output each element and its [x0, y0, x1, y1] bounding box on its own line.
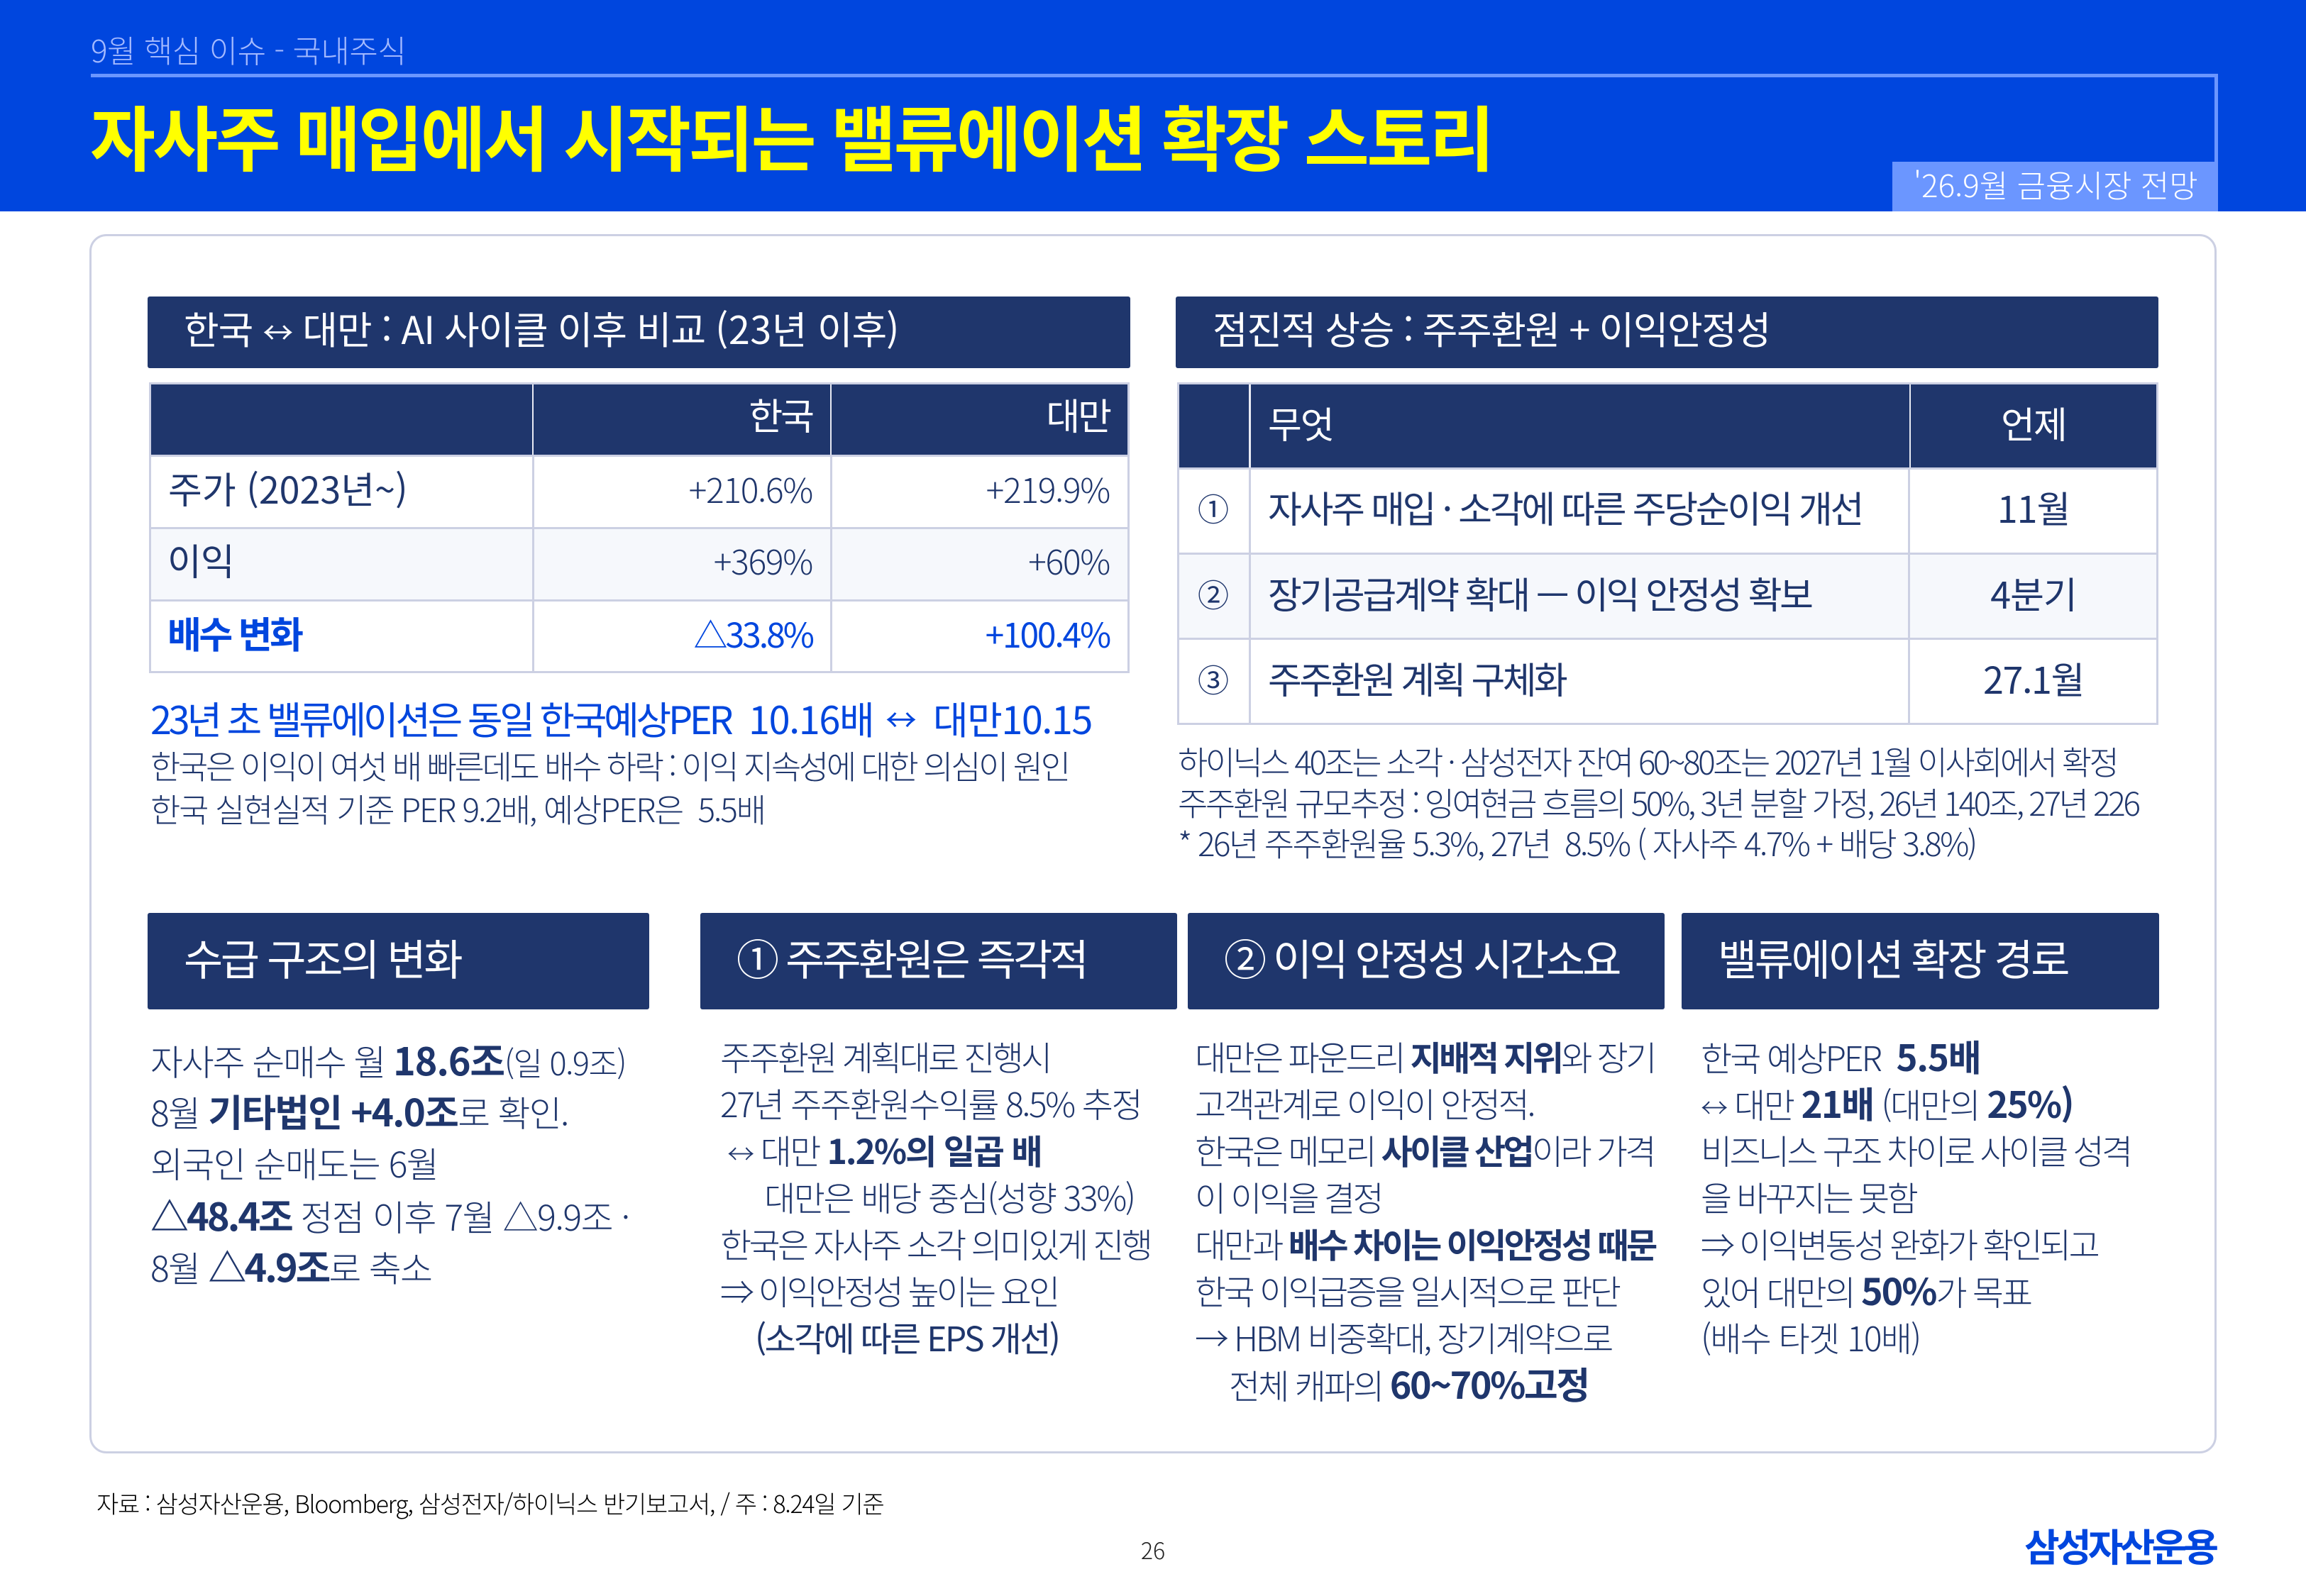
row when: 11월 — [1997, 480, 2070, 533]
note line: 한국 실현실적 기준 PER 9.2배, 예상PER은 5.5배 — [150, 785, 765, 832]
source note: 자료 : 삼성자산운용, Bloomberg, 삼성전자/하이닉스 반기보고서, / 주 : 8.24일 기준 — [96, 1485, 883, 1520]
badge — [1892, 162, 2218, 211]
panel: main card — [89, 234, 2217, 1453]
note line: * 26년 주주환원율 5.3%, 27년 8.5% ( 자사주 4.7% + 배당 3.8%) — [1178, 819, 1976, 866]
text block: valuation path: 한국 예상PER 5.5배 — [1701, 1029, 1980, 1082]
text block: valuation path: ↔ 대만 21배 (대만의 25%) — [1701, 1076, 2073, 1129]
badge text: '26.9월 금융시장 전망 — [1914, 161, 2198, 206]
text block: supply and demand: 8월 기타법인 +4.0조로 확인. — [150, 1084, 568, 1138]
text block: shareholder return: 한국은 자사주 소각 의미있게 진행 — [720, 1218, 1150, 1268]
heading text: 점진적 상승 : 주주환원 + 이익안정성 — [1213, 299, 1770, 355]
circled 1: ① — [1198, 484, 1229, 530]
text block: shareholder return: ⇒ 이익안정성 높이는 요인 — [720, 1265, 1057, 1314]
circled 3: ③ — [1198, 655, 1229, 701]
text block: earnings stability: → HBM 비중확대, 장기계약으로 — [1195, 1312, 1611, 1361]
value: +210.6% — [689, 463, 812, 513]
table header: 대만: 대만 — [1046, 387, 1110, 440]
text block: valuation path — [1701, 1029, 2130, 1361]
text block: supply and demand: 자사주 순매수 월 18.6조(일 0.9조) — [150, 1031, 626, 1087]
text block: earnings stability: 이 이익을 결정 — [1195, 1171, 1381, 1221]
heading text: ② 이익 안정성 시간소요 — [1224, 926, 1619, 988]
text block: shareholder return — [720, 1031, 1150, 1361]
heading text: 한국 ↔ 대만 : AI 사이클 이후 비교 (23년 이후) — [184, 299, 898, 355]
row 3 cells — [1179, 640, 1249, 723]
row when: 27.1월 — [1983, 651, 2084, 704]
row label: 주가: 주가 (2023년~) — [168, 461, 408, 514]
header row — [1179, 384, 2156, 467]
text block: earnings stability — [1195, 1031, 1656, 1409]
blue takeaway — [150, 689, 1092, 746]
text block: supply and demand: △48.4조 정점 이후 7월 △9.9조 · — [150, 1186, 629, 1242]
note line: 하이닉스 40조는 소각 · 삼성전자 잔여 60~80조는 2027년 1월 이사회에서 확정 — [1178, 738, 2117, 785]
text block: earnings stability: 한국은 메모리 사이클 산업이라 가격 — [1195, 1124, 1654, 1174]
header frame line — [91, 74, 2218, 77]
logo: Samsung Asset Management wordmark: 삼성자산운용 — [2024, 1517, 2215, 1573]
row text: 장기공급계약 확대 — 이익 안정성 확보 — [1268, 566, 1811, 619]
blue takeaway: 대만10.15 — [933, 689, 1092, 746]
header row — [151, 384, 1127, 455]
section heading: earnings stability — [1188, 913, 1665, 1009]
value: +100.4% — [986, 608, 1110, 658]
table: what and when — [1177, 382, 2158, 725]
text block: earnings stability: 한국 이익급증을 일시적으로 판단 — [1195, 1265, 1618, 1314]
text block: valuation path: 비즈니스 구조 차이로 사이클 성격 — [1701, 1124, 2130, 1174]
value: +219.9% — [986, 463, 1110, 513]
row text: 자사주 매입 · 소각에 따른 주당순이익 개선 — [1268, 480, 1862, 533]
page number: 26 — [1141, 1534, 1165, 1566]
heading text: 밸류에이션 확장 경로 — [1718, 926, 2068, 988]
blue takeaway: ↔ — [886, 695, 917, 741]
text block: shareholder return: 27년 주주환원수익률 8.5% 추정 — [720, 1077, 1141, 1127]
section heading: gradual rise — [1176, 297, 2158, 368]
row label: 배수 변화: 배수 변화 — [167, 606, 301, 659]
text block: shareholder return: ↔ 대만 1.2%의 일곱 배 — [727, 1124, 1042, 1174]
heading text: ① 주주환원은 즉각적 — [737, 926, 1086, 988]
text block: valuation path: 을 바꾸지는 못함 — [1701, 1171, 1916, 1221]
row 1 cells — [151, 457, 532, 527]
blue takeaway: 10.16배 — [749, 689, 873, 746]
text block: valuation path: 있어 대만의 50%가 목표 — [1701, 1263, 2031, 1316]
title: 자사주 매입에서 시작되는 밸류에이션 확장 스토리 — [90, 83, 1492, 186]
text block: earnings stability: 고객관계로 이익이 안정적. — [1195, 1077, 1533, 1127]
text block: earnings stability: 대만과 배수 차이는 이익안정성 때문 — [1195, 1218, 1655, 1268]
table header: 언제: 언제 — [2001, 396, 2066, 449]
note line: 한국은 이익이 여섯 배 빠른데도 배수 하락 : 이익 지속성에 대한 의심이 원인 — [150, 742, 1069, 789]
text block: supply and demand: 외국인 순매도는 6월 — [150, 1137, 438, 1188]
note line: 주주환원 규모추정 : 잉여현금 흐름의 50%, 3년 분할 가정, 26년 140조, 27년 226 — [1178, 779, 2139, 826]
row 1 cells — [1179, 470, 1249, 553]
table header: 무엇: 무엇 — [1268, 396, 1333, 449]
row 2 cells — [151, 529, 532, 599]
section heading: supply and demand — [148, 913, 649, 1009]
header band — [0, 0, 2306, 211]
heading text: 수급 구조의 변화 — [184, 926, 460, 988]
section heading: Korea vs Taiwan — [148, 297, 1130, 368]
text block: shareholder return: 주주환원 계획대로 진행시 — [720, 1031, 1050, 1080]
section heading: valuation path — [1682, 913, 2159, 1009]
eyebrow: 9월 핵심 이슈 - 국내주식 — [91, 26, 406, 72]
text block: shareholder return: (소각에 따른 EPS 개선) — [755, 1312, 1059, 1361]
text block: valuation path: ⇒ 이익변동성 완화가 확인되고 — [1701, 1218, 2097, 1268]
value: △33.8% — [694, 608, 812, 658]
value: +60% — [1028, 535, 1110, 584]
table: Korea vs Taiwan comparison — [149, 382, 1130, 673]
row when: 4분기 — [1990, 566, 2077, 619]
text block: valuation path: (배수 타겟 10배) — [1701, 1312, 1920, 1361]
text block: supply and demand — [150, 1031, 629, 1293]
blue takeaway: 23년 초 밸류에이션은 동일 한국예상PER — [150, 689, 730, 746]
row 3 cells — [151, 602, 532, 671]
value: +369% — [714, 535, 812, 584]
row 2 cells — [1179, 555, 1249, 638]
row text: 주주환원 계획 구체화 — [1268, 651, 1565, 704]
text block: earnings stability: 대만은 파운드리 지배적 지위와 장기 — [1195, 1031, 1655, 1080]
row label: 이익: 이익 — [167, 533, 234, 586]
circled 2: ② — [1198, 570, 1229, 616]
table header: 한국: 한국 — [749, 387, 812, 440]
text block: earnings stability: 전체 캐파의 60~70%고정 — [1229, 1356, 1589, 1409]
text block: supply and demand: 8월 △4.9조로 축소 — [150, 1237, 431, 1293]
text block: shareholder return: 대만은 배당 중심(성향 33%) — [764, 1171, 1135, 1221]
section heading: shareholder return — [700, 913, 1177, 1009]
